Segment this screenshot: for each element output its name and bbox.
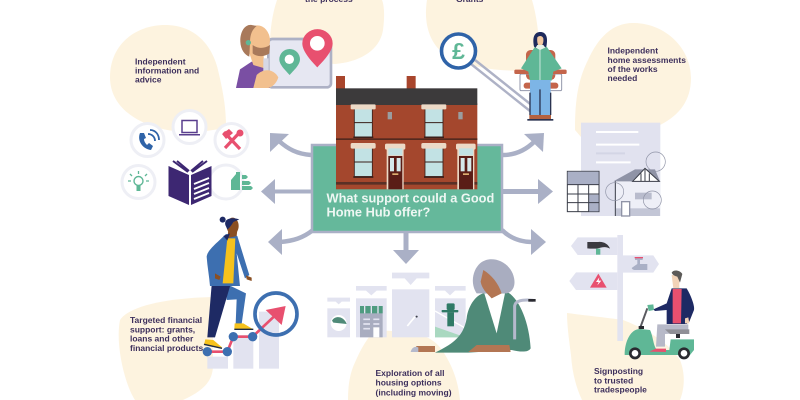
text block: signposting: Signposting bbox=[594, 366, 643, 376]
icon: house and labels bbox=[209, 165, 253, 199]
arrow: left bbox=[261, 179, 311, 204]
text block: home assessments: of the works bbox=[608, 64, 658, 74]
illustration: housing option cards and woman bbox=[327, 259, 536, 353]
text block: signposting: tradespeople bbox=[594, 384, 647, 394]
illustration: man with map tablet bbox=[236, 25, 333, 88]
text block: home assessments: Independent bbox=[608, 46, 658, 56]
text block: independent information: advice bbox=[135, 74, 162, 84]
text block: exploration of housing: Exploration of all bbox=[376, 368, 444, 378]
icon: tools bbox=[215, 124, 248, 156]
text block: independent information: information and bbox=[135, 66, 199, 76]
illustration: person climbing steps with chart bbox=[203, 217, 297, 369]
arrow: right bbox=[503, 179, 553, 204]
illustration: terraced brick house bbox=[336, 76, 477, 189]
text block: targeted financial support: support: grants, bbox=[130, 324, 195, 334]
text block: signposting: to trusted bbox=[594, 376, 633, 386]
icon: laptop bbox=[173, 110, 206, 144]
illustration: woman on stairlift bbox=[514, 32, 567, 121]
text block: exploration of housing: housing options bbox=[376, 378, 442, 388]
arrow: lower right bbox=[502, 229, 546, 255]
illustration: man on mobility scooter bbox=[625, 271, 694, 358]
cream blobs bbox=[110, 0, 691, 400]
icon: open book bbox=[168, 161, 212, 205]
panel: central green box bbox=[312, 145, 502, 232]
heading: central question: What support could a Good bbox=[326, 190, 494, 206]
illustration: signpost bbox=[569, 235, 659, 341]
text block: independent information: Independent bbox=[135, 56, 186, 66]
text block: targeted financial support: Targeted financial bbox=[130, 315, 202, 325]
arrow: lower left bbox=[268, 229, 313, 255]
heading: central question: Home Hub offer? bbox=[326, 204, 430, 220]
arrow: upper right bbox=[503, 133, 544, 155]
icon: light bulb bbox=[122, 166, 155, 198]
illustration: assessment document with house and table bbox=[567, 123, 665, 216]
illustration: pound magnifier bbox=[442, 34, 534, 111]
text block: exploration of housing: (including moving) bbox=[376, 388, 452, 398]
arrow: down bbox=[393, 232, 419, 264]
arrow: upper left bbox=[270, 133, 311, 155]
text block: home assessments: needed bbox=[608, 73, 637, 83]
text block: home assessments: home assessments bbox=[608, 55, 686, 65]
icon: phone bbox=[131, 124, 164, 156]
illustration: pound magnifier: £ bbox=[452, 38, 465, 64]
text block: targeted financial support: financial products bbox=[130, 343, 203, 353]
text block: targeted financial support: loans and other bbox=[130, 334, 194, 344]
